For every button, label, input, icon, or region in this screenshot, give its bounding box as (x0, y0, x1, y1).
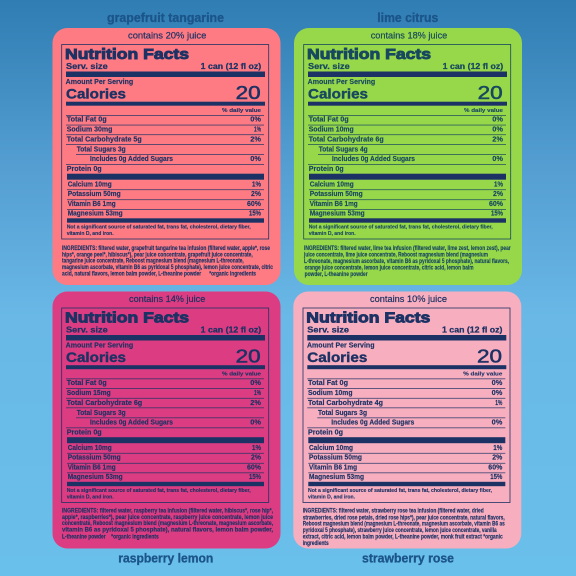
nutrition label: Total Fat 0g (67, 378, 107, 387)
nutrition label: Calories (66, 349, 126, 365)
nutrition label: Protein 0g (67, 164, 102, 173)
ingredients: vitamin B6 as pyridoxal 5 phosphate), natural flavors, lemon balm powder, (62, 528, 273, 534)
nutrition label: 60% (489, 199, 503, 208)
nutrition label: Calories (308, 86, 368, 102)
nutrition label: Vitamin B6 1mg (310, 199, 358, 208)
nutrition label (303, 308, 510, 502)
nutrition label: 2% (250, 398, 262, 407)
panel: raspberry lemon (52, 292, 280, 548)
nutrition label: Vitamin B6 1mg (68, 462, 116, 472)
title: raspberry lemon: raspberry lemon (118, 552, 213, 566)
nutrition label: 20 (478, 82, 503, 103)
ingredients: ingredients (303, 541, 329, 547)
nutrition label: Calcium 10mg (309, 443, 353, 452)
nutrition label: vitamin D, and iron. (67, 494, 114, 500)
nutrition label: Not a significant source of saturated fat, trans fat, cholesterol, dietary fiber, (67, 225, 251, 231)
nutrition label: 1% (254, 388, 261, 397)
nutrition label: Magnesium 53mg (309, 472, 364, 481)
nutrition label: 1 can (12 fl oz) (201, 326, 262, 334)
ingredients: pyridoxal 5 phosphate), strawberry juice concentrate, lemon juice concentrate, vanilla (303, 528, 497, 534)
nutrition label: Serv. size (66, 326, 108, 334)
nutrition label: Sodium 30mg (67, 125, 112, 134)
panel: grapefruit tangarine (52, 28, 280, 285)
nutrition label: 0% (250, 378, 262, 387)
nutrition label: vitamin D, and iron. (308, 494, 355, 500)
nutrition label: Potassium 50mg (310, 189, 363, 198)
nutrition label: 15% (249, 208, 261, 218)
nutrition label: Vitamin B6 1mg (309, 462, 357, 472)
panel: strawberry rose (293, 292, 521, 548)
ingredients: extract, citric acid, lemon balm powder, L-theanine powder, monk fruit extract *organic (303, 534, 503, 540)
ingredients (303, 246, 511, 278)
nutrition label: 2% (492, 135, 504, 144)
nutrition label: 0% (492, 388, 503, 397)
nutrition label: 15% (490, 472, 503, 481)
nutrition label: 1 can (12 fl oz) (443, 62, 504, 71)
nutrition label: Vitamin B6 1mg (68, 199, 116, 208)
ingredients: acid, natural flavors, lemon balm powder, L-theanine powder *organic ingredients (62, 272, 257, 278)
nutrition label: Potassium 50mg (68, 189, 121, 198)
ingredients: apple*, raspberries*), pear juice concentrate, raspberry juice concentrate, lemon juice (62, 515, 274, 521)
nutrition label: Nutrition Facts (65, 46, 189, 63)
nutrition label: 0% (492, 154, 504, 163)
nutrition label: 60% (488, 462, 503, 472)
nutrition label: 1% (495, 398, 503, 407)
juice content: contains 14% juice (129, 294, 205, 305)
nutrition label: Amount Per Serving (307, 342, 374, 350)
nutrition label: 60% (247, 462, 261, 472)
nutrition label: Calories (66, 86, 126, 102)
nutrition label: 60% (247, 199, 261, 208)
nutrition label: Amount Per Serving (66, 342, 133, 350)
nutrition label: Calories (307, 349, 368, 365)
nutrition label: Includes 0g Added Sugars (331, 417, 414, 426)
ingredients (62, 509, 274, 540)
nutrition label: 2% (250, 135, 262, 144)
ingredients: INGREDIENTS: filtered water, grapefruit tangarine tea infusion (filtered water, apple*, rose (62, 246, 271, 252)
nutrition label: Total Sugars 3g (77, 145, 126, 154)
nutrition label: vitamin D, and iron. (67, 231, 114, 237)
nutrition label: Total Fat 0g (308, 378, 348, 387)
nutrition label: Calcium 10mg (68, 180, 112, 189)
nutrition label: 0% (492, 115, 504, 124)
nutrition label: Protein 0g (309, 164, 344, 173)
nutrition label: 1% (252, 443, 261, 452)
ingredients: orange juice concentrate, lemon juice concentrate, citric acid, lemon balm (305, 265, 474, 271)
nutrition label (62, 308, 269, 502)
panel: lime citrus (294, 28, 522, 285)
nutrition label: Not a significant source of saturated fat, trans fat, cholesterol, dietary fiber, (67, 488, 251, 494)
ingredients: INGREDIENTS: filtered water, raspberry tea infusion (filtered water, hibiscus*, rose hip*, (62, 509, 273, 515)
ingredients: powder, L-theanine powder (305, 272, 368, 278)
nutrition label: Sodium 10mg (308, 388, 352, 397)
nutrition label: 0% (492, 378, 503, 387)
nutrition label: 0% (250, 417, 262, 426)
nutrition label: Potassium 50mg (309, 452, 362, 462)
ingredients: Reboost magnesium blend (magnesium L-threonate, magnesium ascorbate, vitamin B6 as (303, 522, 505, 528)
nutrition label: % daily value (222, 372, 262, 378)
nutrition label: 0% (492, 417, 503, 426)
nutrition label: 1% (494, 180, 503, 189)
nutrition label: % daily value (464, 108, 504, 114)
nutrition label: 1% (252, 180, 261, 189)
nutrition label: Total Sugars 4g (319, 145, 368, 154)
ingredients: INGREDIENTS: filtered water, lime tea infusion (filtered water, lime zest, lemon zest), pear (304, 246, 511, 252)
nutrition label: 2% (251, 189, 261, 198)
nutrition label: 20 (236, 346, 261, 366)
nutrition label: Amount Per Serving (66, 79, 133, 86)
juice content: contains 20% juice (128, 30, 206, 42)
nutrition label: Not a significant source of saturated fat, trans fat, cholesterol, dietary fiber, (309, 225, 493, 231)
nutrition label: vitamin D, and iron. (309, 231, 356, 237)
nutrition label: Total Fat 0g (67, 115, 107, 124)
nutrition label (304, 44, 511, 239)
nutrition label: 20 (477, 346, 502, 366)
nutrition label: Magnesium 53mg (68, 472, 123, 481)
nutrition label: Includes 0g Added Sugars (90, 154, 173, 163)
nutrition label: Total Carbohydrate 4g (308, 398, 383, 407)
nutrition label: 1% (493, 443, 503, 452)
title: strawberry rose: strawberry rose (362, 552, 454, 566)
nutrition label: 15% (249, 472, 261, 481)
nutrition label: Protein 0g (67, 428, 102, 436)
ingredients (303, 509, 505, 547)
ingredients: hips*, orange peel*, hibiscus*), pear juice concentrate, grapefruit juice concentrate, (62, 252, 253, 258)
nutrition label: 0% (250, 154, 262, 163)
nutrition label: Magnesium 53mg (310, 208, 365, 218)
nutrition label (62, 44, 269, 239)
nutrition label: 1 can (12 fl oz) (201, 62, 262, 71)
juice content: contains 10% juice (370, 294, 447, 305)
nutrition label: Total Carbohydrate 5g (67, 135, 142, 144)
nutrition label: 20 (236, 82, 261, 103)
nutrition label: Not a significant source of saturated fat, trans fat, cholesterol, dietary fiber, (308, 488, 492, 494)
nutrition label: Serv. size (308, 62, 350, 71)
nutrition label: Sodium 15mg (67, 388, 111, 397)
ingredients: juice concentrate, lime juice concentrate, Reboost magnesium blend (magnesium (303, 253, 488, 259)
nutrition label: Includes 0g Added Sugars (90, 417, 173, 426)
juice content: contains 18% juice (371, 30, 447, 42)
nutrition label: 0% (492, 125, 504, 134)
ingredients: L-theanine powder *organic ingredients (62, 534, 159, 540)
nutrition label: 2% (251, 452, 261, 462)
nutrition label: Total Carbohydrate 6g (309, 135, 384, 144)
ingredients: INGREDIENTS: filtered water, strawberry rose tea infusion (filtered water, dried (303, 509, 484, 515)
nutrition label: 2% (492, 452, 503, 462)
ingredients: magnesium ascorbate, vitamin B6 as pyridoxal 5 phosphate), lemon juice concentrate, citric (62, 265, 274, 271)
ingredients: concentrate, Reboost magnesium blend (magnesium L-threonate, magnesium ascorbate, (62, 521, 273, 527)
nutrition label: Nutrition Facts (65, 310, 189, 326)
nutrition label: 15% (491, 208, 503, 218)
nutrition label: Serv. size (307, 326, 350, 334)
nutrition label: Amount Per Serving (308, 79, 375, 86)
nutrition label: Magnesium 53mg (68, 208, 123, 218)
ingredients: L-threonate, magnesium ascorbate, vitamin B6 as pyridoxal 5 phosphate), natural flavors, (304, 259, 509, 265)
nutrition label: Total Fat 0g (309, 115, 349, 124)
nutrition label: Total Carbohydrate 6g (67, 398, 142, 407)
nutrition label: Nutrition Facts (307, 46, 431, 63)
nutrition label: Calcium 10mg (68, 443, 112, 452)
nutrition label: 1 can (12 fl oz) (442, 326, 503, 334)
nutrition label: 0% (250, 115, 262, 124)
nutrition label: % daily value (463, 372, 503, 378)
nutrition label: Includes 0g Added Sugars (332, 154, 415, 163)
title: grapefruit tangarine: grapefruit tangarine (107, 11, 224, 25)
title: lime citrus: lime citrus (377, 11, 438, 25)
nutrition label: 2% (493, 189, 503, 198)
ingredients: tangarine juice concentrate, Reboost magnesium blend (magnesium L-threonate, (62, 259, 244, 265)
ingredients: strawberries, dried rose petals, dried rose hips*), pear juice concentrate, natural flavors, (303, 515, 505, 521)
nutrition label: % daily value (222, 108, 262, 114)
nutrition label: Total Sugars 3g (77, 408, 126, 417)
nutrition label: Sodium 10mg (309, 125, 354, 134)
nutrition label: Protein 0g (308, 428, 343, 436)
nutrition label: Calcium 10mg (310, 180, 354, 189)
ingredients (62, 246, 274, 278)
nutrition label: Serv. size (66, 62, 108, 71)
nutrition label: Nutrition Facts (306, 310, 430, 326)
nutrition label: Potassium 50mg (68, 452, 121, 462)
nutrition label: Total Sugars 3g (318, 408, 367, 417)
nutrition label: 1% (254, 125, 261, 134)
